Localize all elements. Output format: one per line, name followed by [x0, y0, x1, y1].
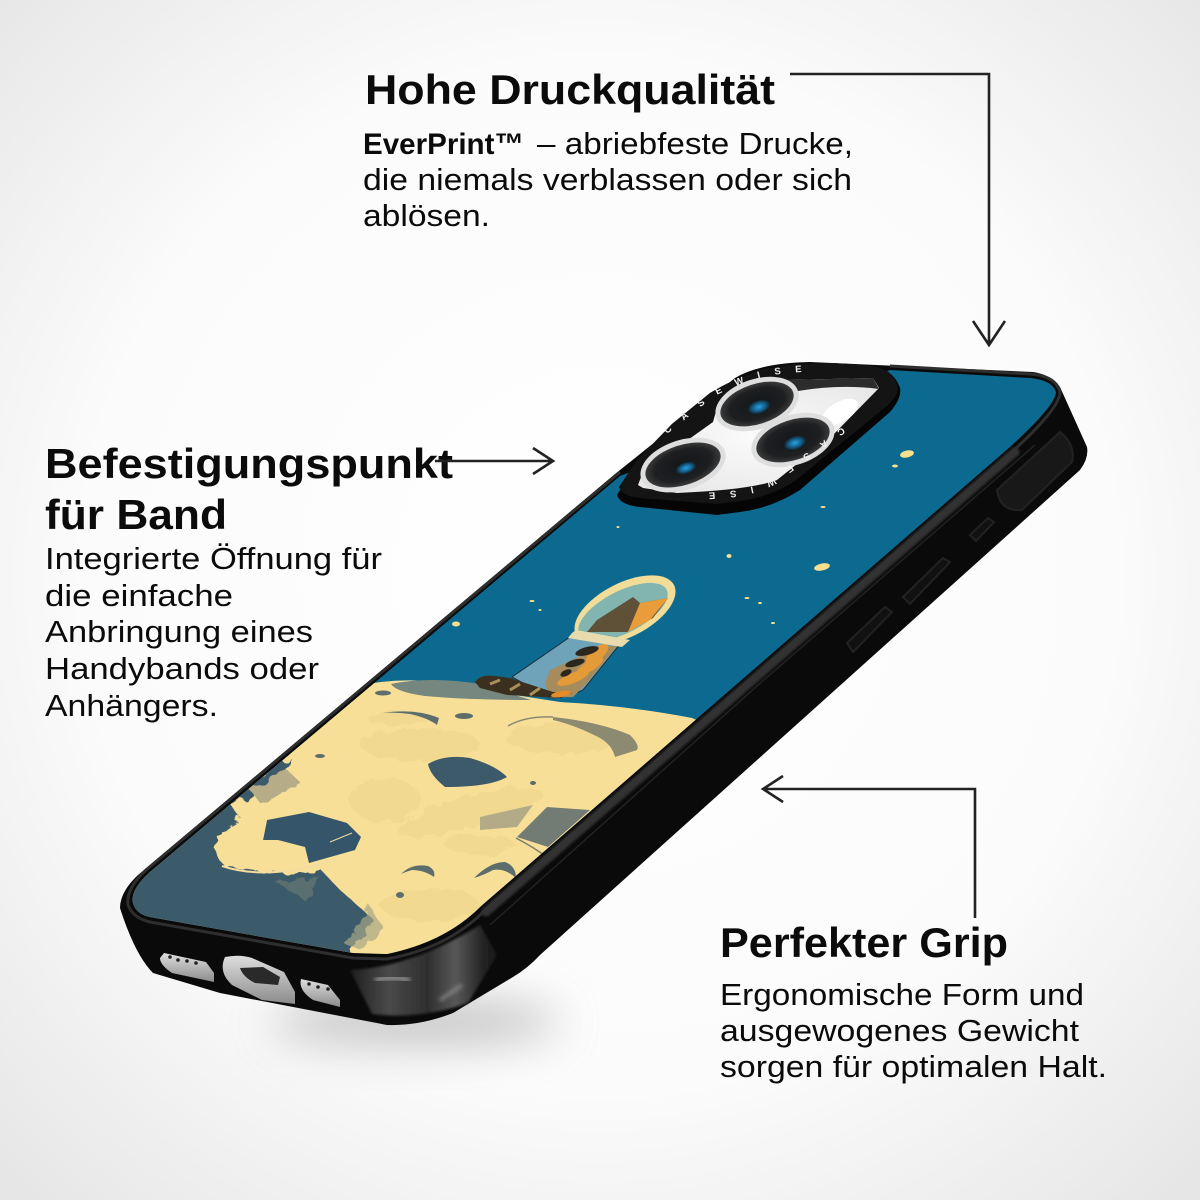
helmet [574, 575, 676, 640]
night sky [132, 370, 1056, 954]
camera ring [617, 363, 900, 515]
tail [475, 676, 572, 698]
heading: Befestigungspunkt [45, 440, 453, 487]
corner sheen [350, 925, 497, 1016]
description: sorgen für optimalen Halt. [720, 1049, 1107, 1084]
camera inner recess [638, 378, 879, 493]
upper right crater [508, 717, 638, 757]
moon mottling [473, 906, 482, 914]
suit [512, 637, 620, 698]
description: Anhängers. [45, 688, 218, 723]
heading: Perfekter Grip [720, 919, 1008, 966]
lens left [633, 428, 733, 502]
arrow to strap point [435, 448, 553, 474]
arrow to print surface [790, 74, 1005, 345]
description [363, 126, 853, 233]
description: Handybands oder [45, 651, 319, 686]
description: Integrierte Öffnung für [45, 541, 382, 576]
phone case illustration [120, 362, 1088, 1026]
callout: print quality [363, 66, 1005, 345]
heading: für Band [45, 491, 227, 538]
lenses [633, 367, 842, 502]
phone drop shadow [270, 996, 560, 1048]
lower-left shaded terrain [132, 759, 384, 952]
description: – abriebfeste Drucke, [537, 126, 853, 161]
brand lettering top: CASEWISE [664, 366, 802, 433]
moon surface [132, 680, 696, 954]
description: Anbringung eines [45, 614, 313, 649]
cat head [587, 597, 668, 632]
case body [120, 362, 1087, 1025]
description [45, 541, 382, 723]
callout: strap attachment [45, 440, 553, 723]
printed artwork [132, 370, 1056, 954]
heading: Hohe Druckqualität [365, 66, 775, 113]
streaked crater [480, 805, 590, 858]
heading [45, 440, 453, 538]
camera ring face [619, 363, 898, 504]
description: ablösen. [363, 198, 490, 233]
astronaut cat [391, 575, 676, 700]
lens top [708, 367, 806, 441]
middle dark crater [428, 757, 507, 787]
description: die niemals verblassen oder sich [363, 162, 852, 197]
large crater [215, 812, 361, 872]
lens right [744, 403, 842, 477]
case side groove [490, 445, 1035, 925]
description: ausgewogenes Gewicht [720, 1013, 1079, 1048]
arrow to case side [763, 776, 975, 918]
description [720, 977, 1107, 1084]
stars [452, 449, 915, 626]
moon shadow of cat [391, 680, 531, 700]
description: EverPrint™ [363, 128, 524, 161]
orange fur [545, 640, 617, 698]
callout: grip [720, 776, 1107, 1084]
camera bump [617, 363, 900, 515]
small craters [315, 690, 536, 898]
collar [568, 630, 630, 647]
case side band [486, 452, 1015, 912]
case inner rim [128, 366, 1060, 959]
side buttons [847, 432, 1073, 652]
description: Ergonomische Form und [720, 977, 1084, 1012]
description: die einfache [45, 578, 233, 613]
brand lettering bottom: CASEWISE [709, 428, 844, 500]
bottom ports [160, 953, 340, 1007]
